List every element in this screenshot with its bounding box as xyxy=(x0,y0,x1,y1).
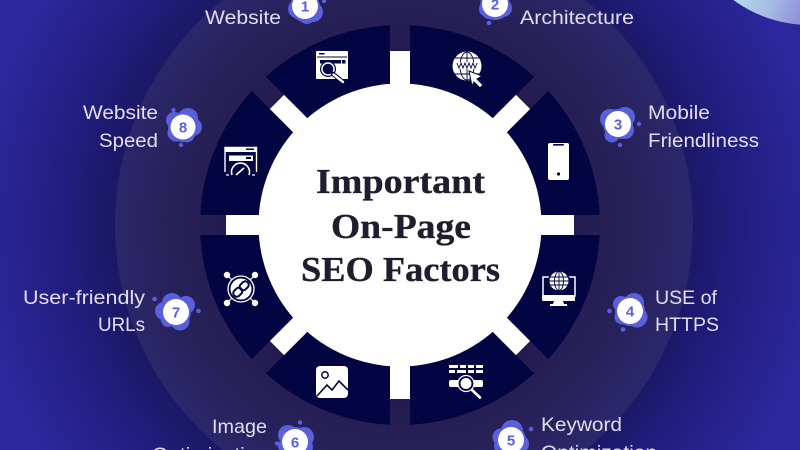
title xyxy=(301,162,500,289)
label 7 xyxy=(23,287,145,336)
large background disc xyxy=(115,0,693,450)
badge 4 xyxy=(607,293,648,332)
badge 5 xyxy=(492,420,533,450)
label 8: Website xyxy=(83,102,158,124)
badge 7 xyxy=(152,293,201,330)
badge 1 xyxy=(288,0,326,24)
label 4: HTTPS xyxy=(655,314,719,336)
badge 2 xyxy=(479,0,512,25)
label 4 xyxy=(655,287,719,336)
label 3: Friendliness xyxy=(648,130,759,152)
badge 4: 4 xyxy=(626,304,635,320)
label 6 xyxy=(152,416,268,450)
label 5 xyxy=(541,414,657,450)
label 7: User-friendly xyxy=(23,287,145,309)
label 5: Keyword xyxy=(541,414,622,436)
icon: link network xyxy=(224,272,258,306)
icon: mobile phone xyxy=(548,143,569,180)
sector 2 xyxy=(410,25,534,118)
icon: browser search xyxy=(316,51,348,82)
title: SEO Factors xyxy=(301,250,500,289)
sector 7 xyxy=(164,205,318,359)
label 7: URLs xyxy=(98,314,145,336)
label 8 xyxy=(83,102,158,152)
icon: www globe cursor xyxy=(452,52,483,88)
badge 3 xyxy=(600,107,641,147)
wheel xyxy=(164,0,636,450)
badge 8 xyxy=(166,108,202,147)
icon: website speed gauge xyxy=(224,147,257,175)
badge 5: 5 xyxy=(507,432,515,450)
sector 3 xyxy=(482,91,636,245)
badge 8: 8 xyxy=(179,120,187,136)
label 1: Website xyxy=(205,7,281,29)
label 2: Architecture xyxy=(520,7,634,29)
icon: keyword search xyxy=(449,365,483,398)
label 8: Speed xyxy=(99,130,158,152)
decorative orb top right xyxy=(680,0,800,25)
label 3 xyxy=(648,102,759,152)
label 6: Image xyxy=(212,416,267,438)
badge 7: 7 xyxy=(172,304,180,322)
icon: image picture xyxy=(316,366,348,398)
sector 1 xyxy=(266,0,420,143)
title: On-Page xyxy=(331,207,471,246)
white hub with spokes xyxy=(226,51,574,399)
badge 3: 3 xyxy=(614,116,622,134)
title: Important xyxy=(316,162,485,201)
sector 5 xyxy=(380,307,534,450)
icon: monitor globe xyxy=(542,270,575,306)
label 4: USE of xyxy=(655,287,718,309)
badge 6 xyxy=(275,420,314,450)
label 3: Mobile xyxy=(648,102,710,124)
sector 6 xyxy=(266,332,390,425)
sector 8 xyxy=(200,91,294,215)
sector 4 xyxy=(506,235,600,359)
